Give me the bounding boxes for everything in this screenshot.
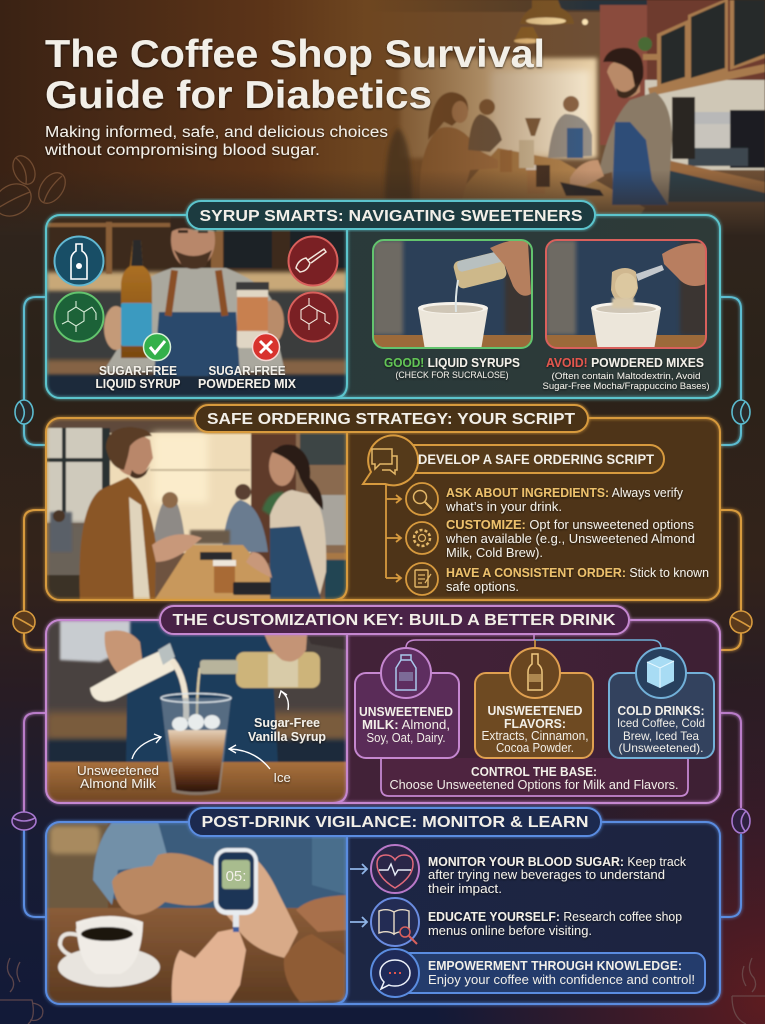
text: consistent order: HAVE A CONSISTENT ORDER: Stick to known xyxy=(446,566,709,580)
label: sugar-free liquid syrup xyxy=(96,364,180,391)
title: The Coffee Shop Survival xyxy=(45,33,545,76)
photo: glucose meter and coffee xyxy=(46,822,348,1006)
photo: good liquid syrup xyxy=(373,240,532,350)
icon: spoon circle xyxy=(288,236,338,286)
heading: post-drink vigilance: POST-DRINK VIGILANCE: MONITOR & LEARN xyxy=(202,814,588,831)
text: customize: when available (e.g., Unsweetened Almond xyxy=(445,532,695,546)
meter reading: 05: xyxy=(226,868,246,885)
label: almond milk xyxy=(77,763,159,791)
card: unsweetened flavors: FLAVORS: xyxy=(504,716,566,731)
panel: control the base: CONTROL THE BASE: xyxy=(471,765,597,779)
arrows: script tree xyxy=(386,484,401,582)
caption: avoid powdered mixes: Sugar-Free Mocha/Frappuccino Bases) xyxy=(542,381,710,392)
label: ice: Ice xyxy=(273,770,291,785)
arrows: photo callouts xyxy=(132,691,288,769)
card: unsweetened flavors: Cocoa Powder. xyxy=(496,741,574,755)
text: monitor blood sugar xyxy=(428,855,687,896)
photo: barista holding syrup and powder xyxy=(46,211,348,399)
card: unsweetened flavors xyxy=(475,673,593,758)
icon: bottle circle xyxy=(54,236,104,286)
outline: syrup panel xyxy=(46,215,720,398)
card: unsweetened milk: Soy, Oat, Dairy. xyxy=(366,730,446,745)
icon: gear xyxy=(406,522,438,554)
empowerment pill xyxy=(395,953,705,993)
subtitle: without compromising blood sugar. xyxy=(44,142,320,159)
card: unsweetened milk: MILK: Almond, xyxy=(362,717,450,732)
text: ask about ingredients: what’s in your drink. xyxy=(445,500,562,514)
card: unsweetened milk: UNSWEETENED xyxy=(359,704,453,719)
arrows: to monitor and educate xyxy=(350,864,367,927)
caption: good liquid syrups: (CHECK FOR SUCRALOSE) xyxy=(396,370,508,381)
photo: pouring milk and syrup xyxy=(46,620,348,804)
label: almond milk: Unsweetened xyxy=(77,763,159,778)
caption: avoid powdered mixes: (Often contain Maltodextrin, Avoid xyxy=(552,371,700,382)
panel: control the base xyxy=(381,758,688,796)
heading: develop a safe ordering script xyxy=(363,435,664,485)
text: consistent order: safe options. xyxy=(446,580,519,594)
panel: control the base: Choose Unsweetened Options for Milk and Flavors. xyxy=(390,778,678,792)
card: cold drinks: Brew, Iced Tea xyxy=(623,729,699,743)
text: educate yourself: menus online before visiting. xyxy=(428,924,592,938)
label: sugar-free liquid syrup: LIQUID SYRUP xyxy=(96,377,180,391)
icon: flavor bottle xyxy=(510,648,560,698)
subtitle: Making informed, safe, and delicious choices xyxy=(45,124,388,141)
title xyxy=(45,33,545,117)
icon: milk carton xyxy=(381,648,431,698)
heading: customization key xyxy=(160,606,629,634)
heading: customization key: THE CUSTOMIZATION KEY: BUILD A BETTER DRINK xyxy=(172,612,616,629)
icon: coffee cups decoration xyxy=(0,958,765,1024)
icon: clipboard xyxy=(406,563,438,595)
side connectors: pink and blue xyxy=(24,713,741,917)
panel: syrup smarts xyxy=(46,201,720,399)
caption: good liquid syrups xyxy=(384,355,520,381)
heading: safe ordering strategy: SAFE ORDERING STRATEGY: YOUR SCRIPT xyxy=(207,411,575,428)
heading: develop a safe ordering script: DEVELOP A SAFE ORDERING SCRIPT xyxy=(418,452,655,467)
text: customize: Milk, Cold Brew). xyxy=(446,546,543,560)
text: monitor blood sugar: MONITOR YOUR BLOOD SUGAR: Keep track xyxy=(428,855,687,869)
icon: book and magnifier xyxy=(371,898,419,946)
title: Guide for Diabetics xyxy=(45,74,432,117)
heading: syrup smarts: SYRUP SMARTS: NAVIGATING SWEETENERS xyxy=(200,208,583,225)
caption: avoid powdered mixes xyxy=(542,355,710,392)
photo: customer talking to barista xyxy=(46,418,348,604)
label: vanilla syrup xyxy=(248,715,326,744)
caption: avoid powdered mixes: AVOID! POWDERED MIXES xyxy=(546,355,704,370)
icon: ice cube xyxy=(636,648,686,698)
text: educate yourself xyxy=(428,910,682,938)
text: customize xyxy=(445,518,695,560)
connectors: options tree xyxy=(406,634,661,648)
text: educate yourself: EDUCATE YOURSELF: Research coffee shop xyxy=(428,910,682,924)
card: cold drinks xyxy=(609,673,714,758)
heading: safe ordering strategy xyxy=(195,405,588,432)
subtitle xyxy=(44,124,388,159)
card: unsweetened milk xyxy=(355,673,459,758)
icon: molecule avoid xyxy=(288,292,338,342)
card: cold drinks: (Unsweetened). xyxy=(618,741,704,755)
text: ask about ingredients xyxy=(445,486,684,514)
card: cold drinks: COLD DRINKS: xyxy=(618,704,704,718)
label: almond milk: Almond Milk xyxy=(80,776,157,791)
panel: customization key xyxy=(46,606,720,804)
card: unsweetened flavors: Extracts, Cinnamon, xyxy=(482,729,588,743)
icon: molecule good xyxy=(54,292,104,342)
label: vanilla syrup: Vanilla Syrup xyxy=(248,729,326,744)
hero cafe photo xyxy=(0,0,765,235)
outline: customization panel xyxy=(46,620,720,803)
text: monitor blood sugar: after trying new beverages to understand xyxy=(428,868,665,882)
heading: post-drink vigilance xyxy=(189,808,601,836)
label: sugar-free powdered mix: SUGAR-FREE xyxy=(208,364,286,378)
icon: coffee beans decoration xyxy=(0,152,71,222)
card: cold drinks: Iced Coffee, Cold xyxy=(617,716,705,730)
icon: red cross xyxy=(252,334,280,360)
text: customize: CUSTOMIZE: Opt for unsweetened options xyxy=(446,518,694,532)
side connectors: teal xyxy=(24,297,741,445)
text: ask about ingredients: ASK ABOUT INGREDIENTS: Always verify xyxy=(446,486,684,500)
panel: safe ordering strategy xyxy=(46,405,720,604)
outline: ordering panel xyxy=(46,418,720,600)
label: sugar-free liquid syrup: SUGAR-FREE xyxy=(99,364,177,378)
text: consistent order xyxy=(446,566,709,594)
heading: syrup smarts xyxy=(187,201,595,229)
empowerment pill: EMPOWERMENT THROUGH KNOWLEDGE: xyxy=(428,958,682,973)
icon: connector beans xyxy=(12,400,752,833)
icon: heart monitor xyxy=(371,845,419,893)
label: vanilla syrup: Sugar-Free xyxy=(254,715,320,730)
panel: post-drink vigilance xyxy=(46,808,720,1006)
side connectors: orange xyxy=(24,510,741,650)
icon: speech bubble xyxy=(371,949,419,997)
empowerment pill: Enjoy your coffee with confidence and control! xyxy=(428,973,695,987)
caption: good liquid syrups: GOOD! LIQUID SYRUPS xyxy=(384,355,520,370)
outline: vigilance panel xyxy=(46,822,720,1004)
icon: green check xyxy=(144,334,170,360)
label: sugar-free powdered mix xyxy=(198,364,297,391)
text: monitor blood sugar: their impact. xyxy=(428,882,502,896)
label: sugar-free powdered mix: POWDERED MIX xyxy=(198,377,297,391)
icon: magnifier xyxy=(406,483,438,515)
photo: avoid powdered mixes xyxy=(546,240,707,350)
card: unsweetened flavors: UNSWEETENED xyxy=(488,703,582,718)
